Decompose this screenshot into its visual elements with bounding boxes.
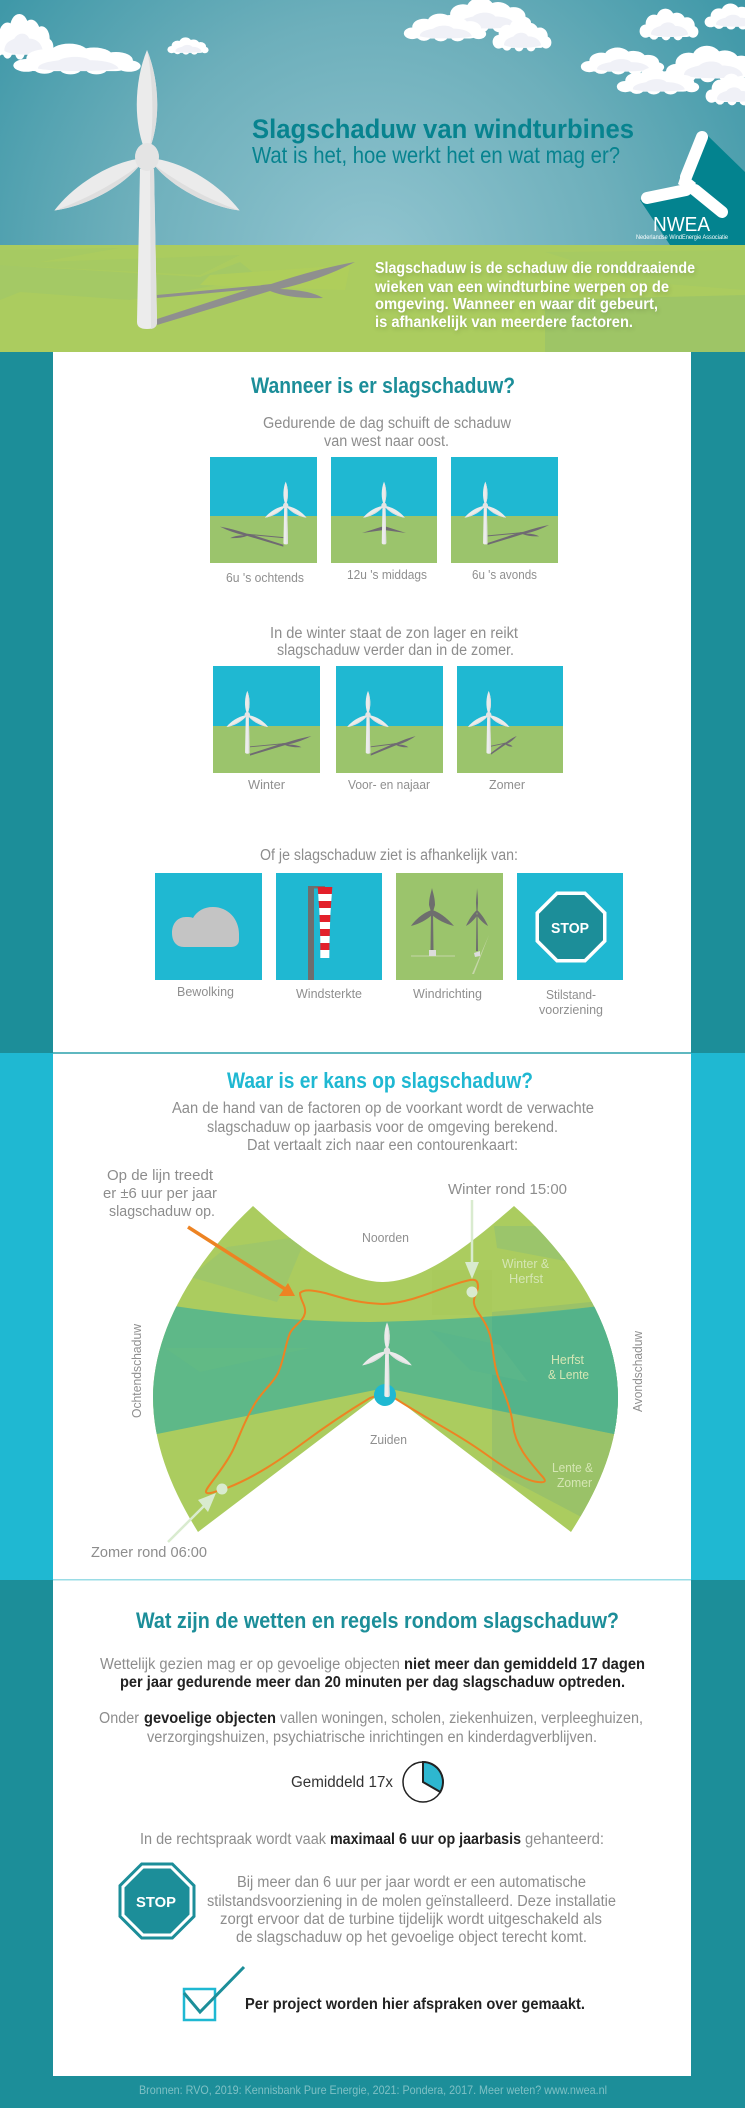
text: per project: Per project worden hier afspraken over gemaakt. [245,1996,585,2013]
icon: checkbox [184,1967,244,2020]
text: dag: Gedurende de dag schuift de schaduw [263,415,512,432]
tile: windsterkte: Windsterkte [296,986,362,1001]
text: afhankelijk: Of je slagschaduw ziet is afhankelijk van: [260,847,518,864]
text: contourenkaart intro: Dat vertaalt zich naar een contourenkaart: [247,1137,518,1154]
footer [0,2076,745,2108]
tile: 12u middags: 12u 's middags [347,567,427,582]
arrow: zomer rond 06:00 [168,1484,228,1542]
map labels: Winter rond 15:00 [448,1182,567,1198]
map labels [91,1182,645,1561]
heading: wanneer: Wanneer is er slagschaduw? [251,373,515,398]
text: stilstandsvoorziening: stilstandsvoorziening in de molen geïnstalleerd. Deze installatie [207,1893,616,1910]
map labels: Noorden [362,1230,409,1245]
text: wettelijk [100,1656,645,1691]
tile: bewolking [155,873,262,999]
tile: stilstandvoorziening: STOP [551,921,589,937]
contour map [150,1200,625,1540]
big wind turbine [49,50,245,329]
text: winter: slagschaduw verder dan in de zomer. [277,642,514,659]
map labels: Zomer [557,1475,593,1490]
tile: zomer: Zomer [489,777,526,792]
heading: wetten: Wat zijn de wetten en regels rondom slagschaduw? [136,1608,619,1633]
logo: NWEA: Nederlandse WindEnergie Associatie [636,235,729,241]
text: contourenkaart intro: slagschaduw op jaarbasis voor de omgeving berekend. [207,1119,558,1136]
map labels: Herfst [509,1271,543,1286]
label: gemiddeld 17x: Gemiddeld 17x [291,1774,393,1791]
text: gevoelige objecten: gevoelige objecten [144,1710,276,1727]
text: contourenkaart intro: Aan de hand van de factoren op de voorkant wordt de verwachte [172,1100,594,1117]
arrow: winter rond 15:00 [465,1200,479,1298]
tile: stilstandvoorziening: Stilstand- [546,987,596,1002]
tile: zomer [457,666,563,792]
tile: 6u avonds [451,457,558,582]
text: rechtspraak: In de rechtspraak wordt vaak [140,1831,326,1848]
header: sky and meadow [0,0,745,352]
tile: stilstandvoorziening [517,873,623,1017]
tile: winter: Winter [248,777,286,792]
title [252,114,634,168]
text: gevoelige objecten [99,1710,643,1746]
text: wettelijk: Wettelijk gezien mag er op gevoelige objecten [100,1656,400,1673]
tile: windrichting: Windrichting [413,986,482,1001]
footer: Bronnen: RVO, 2019: Kennisbank Pure Energie, 2021: Pondera, 2017. Meer weten? www.nwea.nl [139,2083,607,2097]
text: gevoelige objecten: verzorgingshuizen, psychiatrische inrichtingen en kinderdagverblijven. [147,1729,597,1746]
logo: NWEA: NWEA [653,214,711,236]
tile: windrichting [396,873,503,1001]
text: gevoelige objecten: vallen woningen, scholen, ziekenhuizen, verpleeghuizen, [280,1710,643,1727]
logo: NWEA [636,135,745,245]
icon: stop sign [118,1862,196,1940]
text: winter: In de winter staat de zon lager en reikt [270,625,519,642]
text: stilstandsvoorziening: de slagschaduw op het gevoelige object terecht komt. [236,1929,587,1946]
callout: op de lijn: er ±6 uur per jaar [103,1186,217,1202]
text: wettelijk: per jaar gedurende meer dan 20 minuten per dag slagschaduw optreden. [120,1674,625,1691]
panel: wetten en regels [99,1608,645,2020]
text: stilstandsvoorziening [207,1874,616,1946]
intro text: omgeving. Wanneer en waar dit gebeurt, [375,296,658,313]
map labels: Lente & [552,1460,593,1475]
callout: op de lijn [103,1168,217,1220]
text: rechtspraak: maximaal 6 uur op jaarbasis [330,1831,521,1848]
tile: 6u avonds: 6u 's avonds [472,567,537,582]
map labels: Zuiden [370,1432,407,1447]
tile: bewolking: Bewolking [177,984,234,999]
orange contour line [206,1280,545,1493]
title: Slagschaduw van windturbines [252,114,634,144]
intro text: is afhankelijk van meerdere factoren. [375,314,633,331]
clouds [0,0,745,105]
text: rechtspraak: gehanteerd: [525,1831,604,1848]
callout: op de lijn: Op de lijn treedt [107,1168,213,1184]
icon: wind turbine on map [361,1322,413,1406]
map labels: Ochtendschaduw [129,1323,144,1418]
big turbine shadow [157,262,355,325]
tile: voor- en najaar [336,666,443,792]
arrow: orange to line [188,1227,295,1296]
text: winter [270,625,519,659]
tile: stilstandvoorziening: voorziening [539,1002,603,1017]
map labels: Winter & [502,1256,549,1271]
text: wettelijk: niet meer dan gemiddeld 17 dagen [404,1656,645,1673]
panel: wanneer [155,373,623,1017]
intro text: wieken van een windturbine werpen op de [374,279,669,296]
text: dag [263,415,512,450]
map labels: Herfst [551,1352,584,1367]
intro text [374,260,695,331]
panel: waar [91,1068,645,1561]
text: gevoelige objecten: Onder [99,1710,139,1727]
text: rechtspraak [140,1831,604,1848]
map labels: & Lente [548,1367,589,1382]
text: stilstandsvoorziening: Bij meer dan 6 uur per jaar wordt er een automatische [237,1874,586,1891]
text: dag: van west naar oost. [324,433,449,450]
tile: windsterkte [276,873,382,1001]
callout: op de lijn: slagschaduw op. [109,1204,215,1220]
heading: waar: Waar is er kans op slagschaduw? [227,1068,533,1093]
map labels: Zomer rond 06:00 [91,1545,207,1561]
tile: winter [213,666,320,792]
map labels: Avondschaduw [630,1330,645,1412]
title: Wat is het, hoe werkt het en wat mag er? [252,142,620,168]
text: contourenkaart intro [172,1100,594,1154]
intro text: Slagschaduw is de schaduw die ronddraaiende [375,260,695,277]
tile: 12u middags [331,457,437,582]
text: stilstandsvoorziening: zorgt ervoor dat de turbine tijdelijk wordt uitgeschakeld als [220,1911,602,1928]
icon: stop sign: STOP [136,1894,176,1911]
tile: 6u ochtends [210,457,317,585]
tile: 6u ochtends: 6u 's ochtends [226,570,304,585]
pie chart: 17x [403,1762,443,1802]
tile: voor- en najaar: Voor- en najaar [348,777,431,792]
